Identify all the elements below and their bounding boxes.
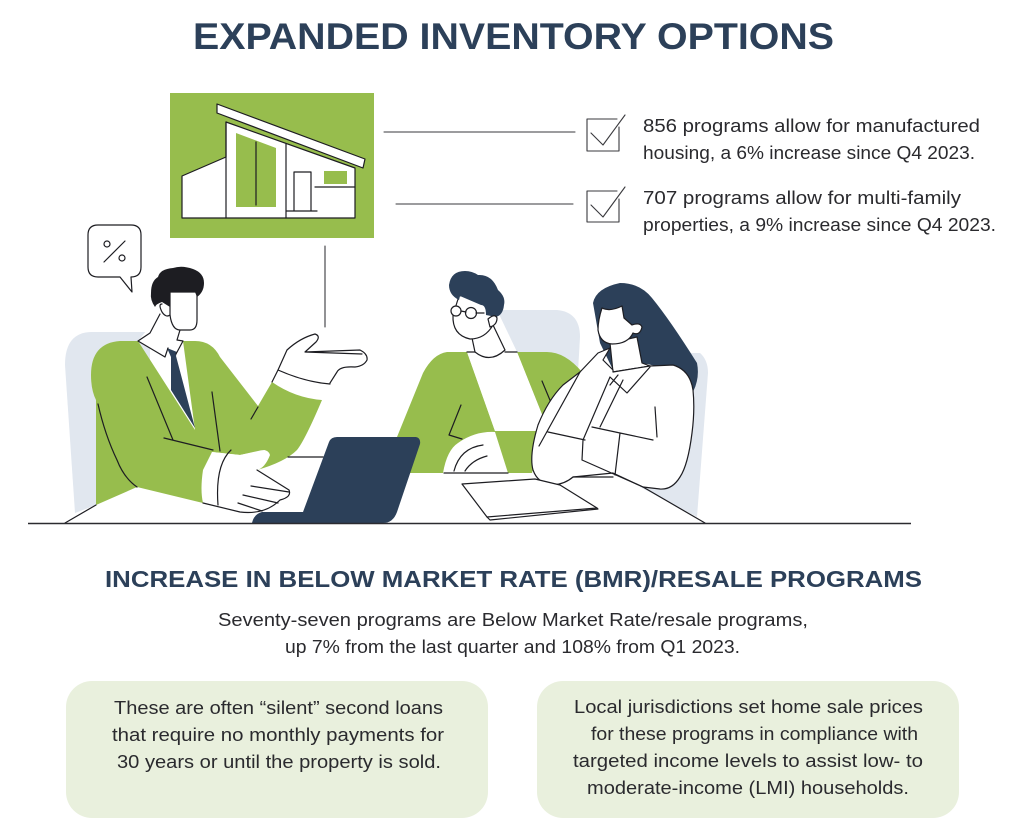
text: multi-family properties: 707 programs allow for multi-family <box>643 188 961 208</box>
illustration: man in green jacket <box>65 267 367 523</box>
panel: silent second loans <box>66 681 488 818</box>
text: manufactured housing <box>643 116 980 163</box>
panel: local jurisdictions: targeted income levels to assist low- to <box>573 751 923 771</box>
panel: local jurisdictions <box>537 681 959 818</box>
illustration: chairs <box>65 310 708 517</box>
text: manufactured housing: housing, a 6% increase since Q4 2023. <box>643 143 975 163</box>
panel: silent second loans: 30 years or until the property is sold. <box>117 752 441 772</box>
text: multi-family properties: properties, a 9% increase since Q4 2023. <box>643 215 996 235</box>
heading: BMR programs: INCREASE IN BELOW MARKET RATE (BMR)/RESALE PROGRAMS <box>105 566 922 592</box>
illustration: laptop <box>252 437 420 523</box>
icon: checkbox one <box>587 115 625 151</box>
panel: silent second loans: that require no monthly payments for <box>112 725 444 745</box>
text: manufactured housing: 856 programs allow for manufactured <box>643 116 980 136</box>
illustration: man with glasses <box>390 271 582 473</box>
title: EXPANDED INVENTORY OPTIONS <box>193 16 834 57</box>
panel: silent second loans: These are often “silent” second loans <box>114 698 443 718</box>
text: BMR summary <box>218 610 808 657</box>
desk line <box>28 522 911 524</box>
connector: house to first item <box>384 131 575 133</box>
text: BMR summary: Seventy-seven programs are Below Market Rate/resale programs, <box>218 610 808 630</box>
text: multi-family properties <box>643 188 996 235</box>
panel: local jurisdictions: Local jurisdictions set home sale prices <box>574 697 923 717</box>
text: BMR summary: up 7% from the last quarter and 108% from Q1 2023. <box>285 637 740 657</box>
illustration: woman <box>462 283 705 523</box>
connector: house to speaker <box>324 246 326 327</box>
panel: local jurisdictions: for these programs in compliance with <box>591 724 918 744</box>
illustration: house panel <box>170 93 374 238</box>
icon: checkbox two <box>587 187 625 222</box>
panel: local jurisdictions: moderate-income (LMI) households. <box>587 778 909 798</box>
icon: percent speech bubble <box>88 225 141 292</box>
connector: house to second item <box>396 203 573 205</box>
